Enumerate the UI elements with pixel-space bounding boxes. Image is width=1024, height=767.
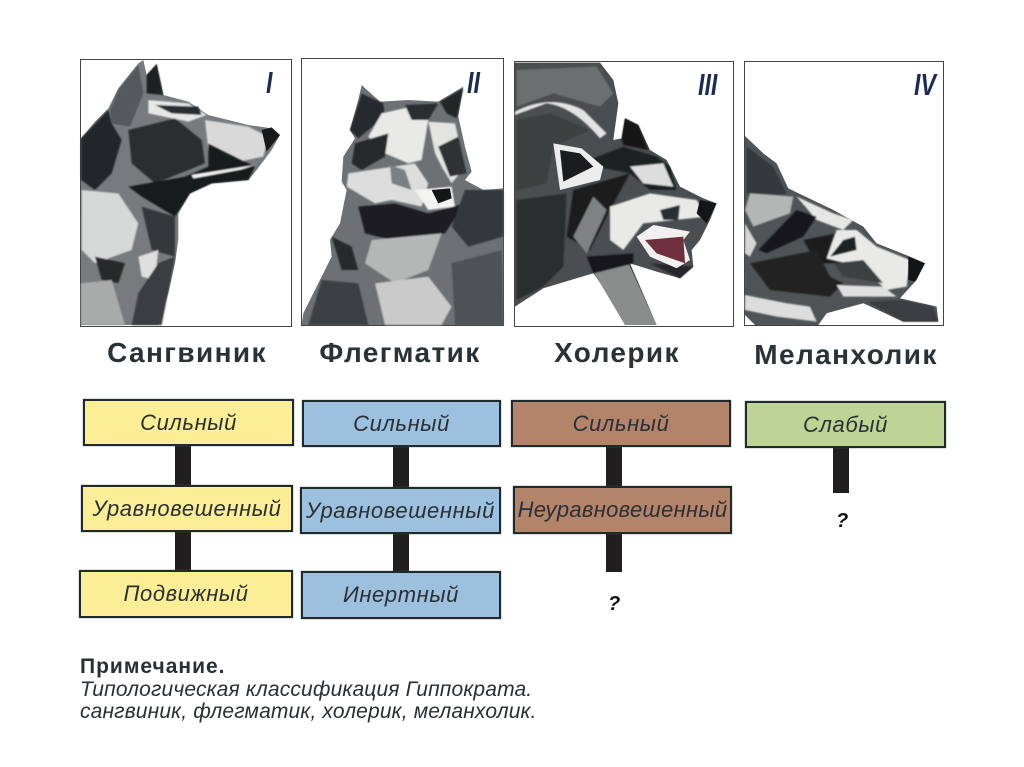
box: Уравновешенный 2: Уравновешенный [306, 498, 495, 522]
panel: wolf III choleric [514, 62, 734, 326]
box: Инертный [301, 571, 501, 619]
box: Подвижный [79, 570, 293, 618]
box: Уравновешенный 1 [81, 485, 293, 532]
panel: wolf IV melancholic [744, 62, 944, 326]
note: сангвиник, флегматик, холерик, меланхолик. [80, 700, 537, 723]
box: Сильный 1: Сильный [140, 410, 237, 434]
connector: column 1 [175, 440, 191, 575]
box: Уравновешенный 2 [300, 487, 501, 534]
box: Сильный 1 [83, 399, 294, 446]
note: Типологическая классификация Гиппократа. [80, 678, 532, 700]
note: Примечание. [80, 655, 226, 678]
connector: column 4 [833, 440, 849, 493]
question mark column 4: ? [836, 510, 848, 532]
note [80, 655, 537, 723]
box: Подвижный: Подвижный [123, 581, 249, 606]
panel: wolf I sanguine [80, 60, 292, 326]
box: Слабый: Слабый [803, 412, 888, 436]
label: IV: IV [914, 67, 938, 102]
box: Сильный 2: Сильный [353, 410, 450, 436]
box: Неуравновешенный [513, 486, 732, 534]
label: I: I [266, 65, 274, 100]
heading: Флегматик: Флегматик [319, 337, 481, 368]
box: Инертный: Инертный [343, 582, 459, 607]
connector: column 2 [393, 440, 409, 575]
heading: Сангвиник: Сангвиник [107, 337, 267, 368]
heading: Меланхолик: Меланхолик [754, 339, 938, 370]
label: II: II [467, 65, 481, 100]
box: Сильный 2 [302, 400, 501, 447]
box: Неуравновешенный: Неуравновешенный [518, 497, 727, 522]
label: III: III [698, 67, 719, 102]
box: Сильный 3: Сильный [573, 410, 669, 436]
panel: wolf II phlegmatic [302, 58, 504, 326]
box: Слабый [745, 401, 946, 448]
box: Сильный 3 [511, 400, 731, 447]
connector: column 3 [606, 440, 622, 572]
box: Уравновешенный 1: Уравновешенный [93, 496, 281, 520]
heading: Холерик: Холерик [554, 337, 680, 368]
question mark column 3: ? [608, 593, 620, 615]
